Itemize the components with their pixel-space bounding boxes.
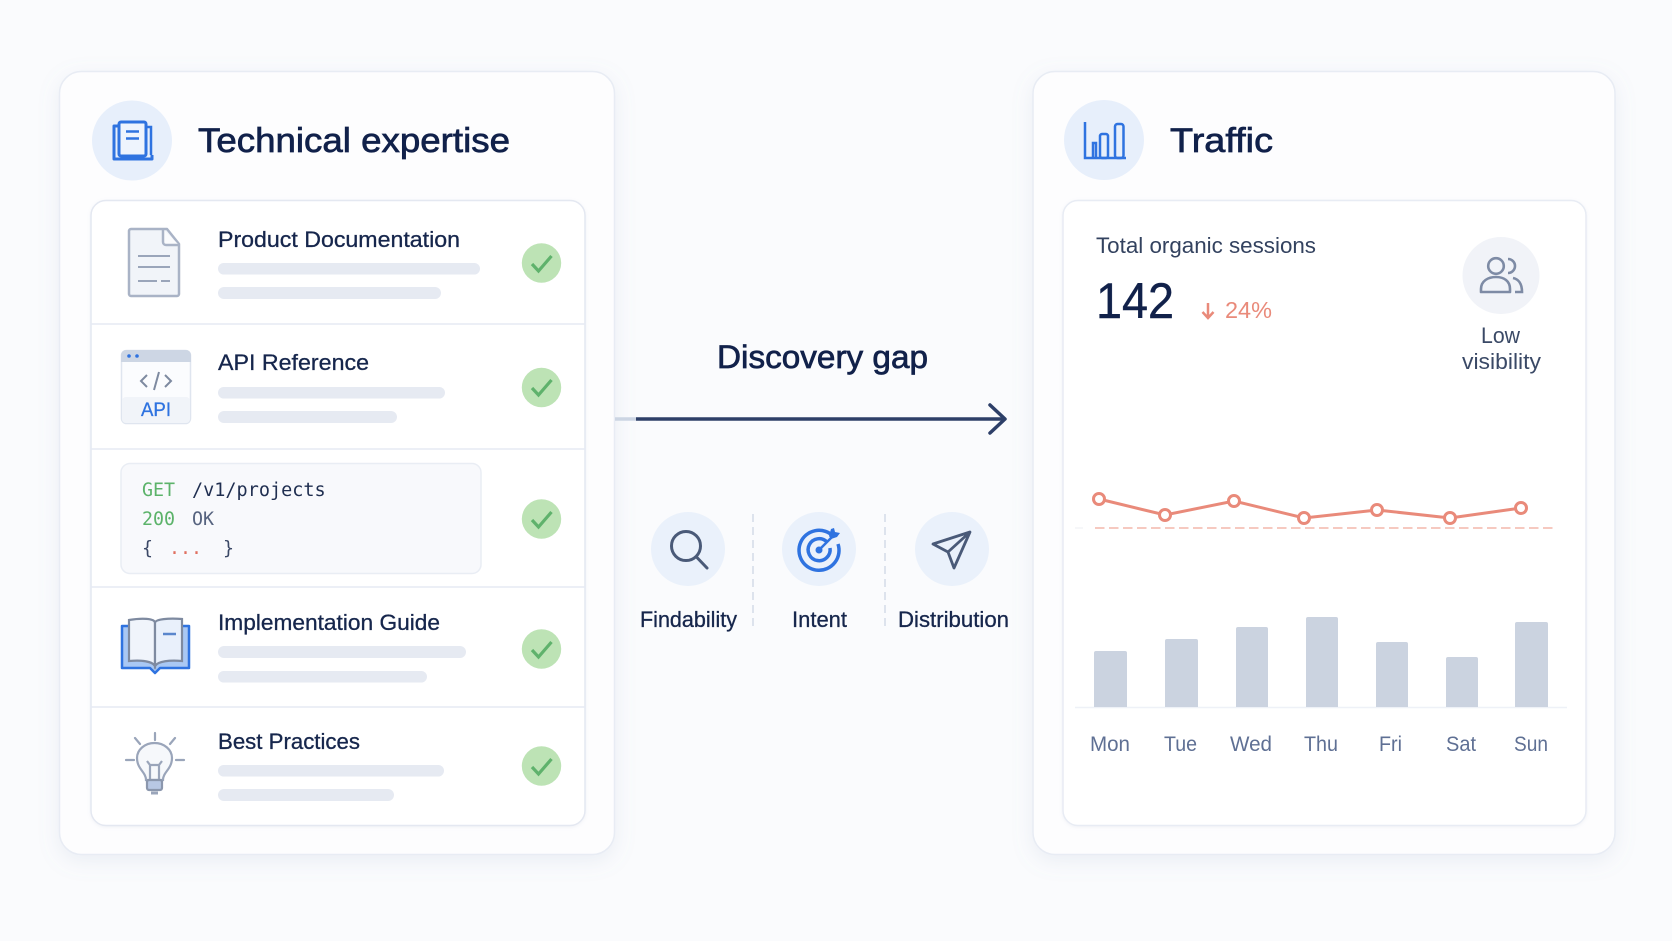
code block xyxy=(121,464,481,574)
item: intent xyxy=(782,512,856,632)
code block: } xyxy=(223,538,234,559)
metric: 142: 142 xyxy=(1096,273,1174,329)
panel: discovery gap xyxy=(615,339,1009,632)
heading: technical expertise: Technical expertise xyxy=(198,122,510,160)
panel: documentation list xyxy=(91,200,585,826)
icon: magnifier xyxy=(651,512,725,586)
icon: documents header xyxy=(92,100,172,180)
icon: paper plane xyxy=(915,512,989,586)
item: findability xyxy=(640,512,737,632)
code block: OK xyxy=(192,509,214,530)
code block: GET xyxy=(142,480,175,501)
code block: ... xyxy=(169,538,202,559)
axis labels: days: Fri xyxy=(1379,732,1402,756)
code block: /v1/projects xyxy=(192,480,326,501)
label: low visibility: Low xyxy=(1481,323,1520,348)
label: low visibility: visibility xyxy=(1462,349,1541,374)
axis labels: days: Sun xyxy=(1514,732,1548,756)
axis labels: days: Mon xyxy=(1090,732,1130,756)
row: api reference xyxy=(121,350,561,424)
icon: light bulb xyxy=(126,733,184,793)
callout: low visibility xyxy=(1462,237,1541,374)
icon: document xyxy=(129,229,179,296)
axis labels: days: Wed xyxy=(1230,732,1272,756)
panel: technical expertise xyxy=(60,72,614,854)
icon: check xyxy=(522,499,561,539)
panel: sessions chart xyxy=(1063,200,1586,826)
icon: check xyxy=(522,243,561,283)
label: low visibility xyxy=(1462,323,1541,374)
heading: traffic: Traffic xyxy=(1170,122,1273,160)
panel: traffic xyxy=(1033,72,1615,854)
label: best practices: Best Practices xyxy=(218,729,360,754)
axis labels: days: Tue xyxy=(1164,732,1197,756)
axis labels: days: Sat xyxy=(1446,732,1476,756)
heading: discovery gap: Discovery gap xyxy=(717,339,928,375)
icon: bar chart header xyxy=(1064,100,1144,180)
bar chart: daily sessions xyxy=(1075,617,1567,708)
icon: api window xyxy=(121,350,191,424)
icon: check xyxy=(522,746,561,786)
arrow: discovery gap xyxy=(615,405,1005,433)
row: best practices xyxy=(126,729,561,801)
axis labels: days xyxy=(1090,732,1548,756)
label: api reference: API Reference xyxy=(218,350,369,375)
line chart: sessions trend xyxy=(1075,494,1555,528)
metric: down 24 percent: 24% xyxy=(1225,297,1272,323)
icon: users xyxy=(1462,237,1540,314)
code block: 200 xyxy=(142,509,175,530)
icon: check xyxy=(522,368,561,407)
label: total organic sessions: Total organic sessions xyxy=(1096,233,1316,258)
icon: check xyxy=(522,629,561,669)
code block: { xyxy=(142,538,153,559)
row: code sample xyxy=(121,464,561,574)
axis labels: days: Thu xyxy=(1304,732,1338,756)
metric: down 24 percent xyxy=(1202,297,1272,323)
icon: open book xyxy=(122,619,189,673)
icon: api window: API xyxy=(141,400,171,421)
label: distribution: Distribution xyxy=(898,607,1009,632)
icon: target xyxy=(782,512,856,586)
row: product documentation xyxy=(129,227,561,299)
label: implementation guide: Implementation Guide xyxy=(218,610,440,635)
label: intent: Intent xyxy=(792,607,847,632)
item: distribution xyxy=(898,512,1009,632)
label: product documentation: Product Documentation xyxy=(218,227,460,252)
label: findability: Findability xyxy=(640,607,737,632)
row: implementation guide xyxy=(122,610,561,682)
